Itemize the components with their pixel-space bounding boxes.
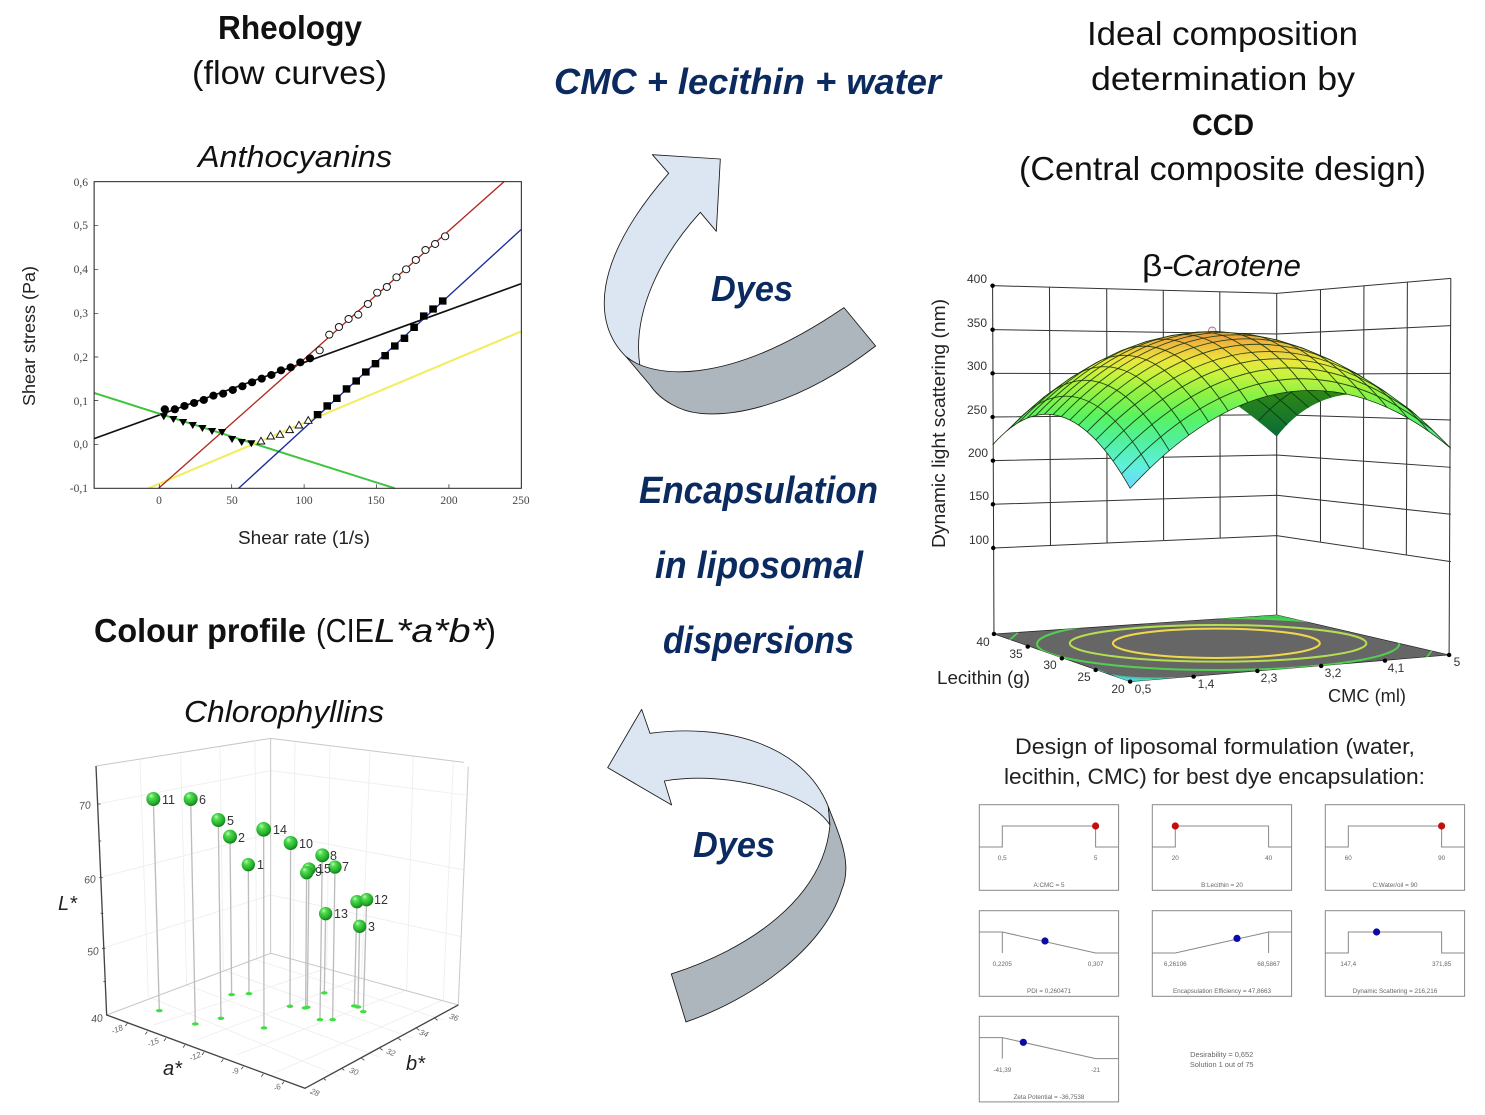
heading: colour profile: ) bbox=[485, 612, 496, 649]
panel: zeta potential: -21 bbox=[1091, 1067, 1101, 1074]
chart: 3D response surface: 3,2 bbox=[1325, 666, 1342, 680]
heading: encapsulation in liposomal dispersions bbox=[639, 470, 878, 662]
panel: C water oil: C:Water/oil = 90 bbox=[1372, 882, 1418, 889]
heading: ideal composition CCD: determination by bbox=[1091, 60, 1356, 97]
chart: 3D response surface: 20 bbox=[1111, 682, 1125, 696]
chart: 3D scatter of colour coordinates: 9 bbox=[315, 865, 322, 879]
chart: 3D scatter of colour coordinates: 5 bbox=[227, 814, 234, 828]
chart: 3D response surface: 4,1 bbox=[1388, 661, 1405, 675]
heading: colour profile bbox=[94, 612, 496, 649]
floor contour plot bbox=[994, 615, 1449, 682]
panel: encapsulation efficiency bbox=[1152, 911, 1292, 996]
text: desirability summary bbox=[1190, 1050, 1254, 1069]
heading: colour profile: Colour profile bbox=[94, 612, 306, 649]
chart: 3D scatter of colour coordinates: -12 bbox=[188, 1050, 203, 1063]
panel: A CMC: 0,5 bbox=[998, 855, 1007, 862]
panel: encapsulation efficiency: Encapsulation Efficiency = 47,8663 bbox=[1173, 988, 1272, 995]
panel: C water oil: 90 bbox=[1438, 855, 1446, 862]
chart: flow curves: 0,6 bbox=[74, 177, 88, 189]
heading: rheology: Rheology bbox=[218, 9, 363, 46]
chart: 3D scatter of colour coordinates: 3 bbox=[368, 920, 375, 934]
panel: C water oil: 60 bbox=[1345, 855, 1352, 862]
chart: flow curves bbox=[19, 177, 530, 548]
chart: flow curves: 200 bbox=[440, 495, 458, 507]
heading: colour profile: L*a*b* bbox=[374, 612, 487, 649]
chart: 3D scatter of colour coordinates: 10 bbox=[299, 837, 313, 851]
chart: 3D scatter of colour coordinates: 34 bbox=[418, 1028, 430, 1040]
text: desirability summary: Solution 1 out of 75 bbox=[1190, 1060, 1254, 1069]
chart: flow curves: 0,4 bbox=[74, 264, 88, 276]
chart: 3D response surface: 200 bbox=[968, 446, 988, 460]
chart: 3D scatter of colour coordinates: 13 bbox=[334, 907, 348, 921]
panel: B lecithin: 40 bbox=[1265, 855, 1273, 862]
panel: zeta potential bbox=[979, 1016, 1119, 1102]
chart: 3D scatter of colour coordinates: a* bbox=[163, 1058, 183, 1080]
chart: 3D scatter of colour coordinates: 12 bbox=[374, 893, 388, 907]
chart: 3D response surface bbox=[928, 272, 1461, 706]
chart: 3D response surface: 2,3 bbox=[1261, 671, 1278, 685]
heading: encapsulation in liposomal dispersions: in liposomal bbox=[655, 545, 864, 587]
chart: 3D scatter of colour coordinates: 7 bbox=[342, 860, 349, 874]
chart: 3D response surface: 300 bbox=[967, 359, 987, 373]
arrow: upper dyes arrow bbox=[604, 155, 876, 414]
panel: B lecithin bbox=[1152, 805, 1292, 890]
chart: flow curves: 0,2 bbox=[74, 352, 88, 364]
heading: colour profile: (CIE bbox=[316, 612, 374, 649]
chart: 3D scatter of colour coordinates: 32 bbox=[385, 1047, 397, 1059]
chart: 3D scatter of colour coordinates: -9 bbox=[230, 1066, 241, 1077]
subheading: beta-carotene: β- bbox=[1142, 248, 1174, 283]
chart: 3D scatter of colour coordinates: 11 bbox=[162, 793, 175, 807]
label: dyes lower: Dyes bbox=[693, 824, 775, 865]
chart: 3D response surface: 1,4 bbox=[1198, 677, 1215, 691]
heading: ideal composition CCD: (Central composite design) bbox=[1019, 150, 1426, 187]
chart: 3D response surface: 5 bbox=[1454, 655, 1461, 669]
panel: PDI: 0,2205 bbox=[993, 961, 1012, 968]
chart: flow curves: -0,1 bbox=[70, 483, 88, 495]
chart: 3D scatter of colour coordinates: 36 bbox=[448, 1012, 460, 1024]
panel: dynamic scattering: 371,85 bbox=[1432, 961, 1452, 968]
chart: 3D scatter of colour coordinates: 14 bbox=[273, 823, 287, 837]
chart: flow curves: 0,1 bbox=[74, 396, 88, 408]
panel: A CMC: A:CMC = 5 bbox=[1034, 882, 1065, 889]
subheading: anthocyanins: Anthocyanins bbox=[196, 139, 392, 174]
panel: zeta potential: Zeta Potential = -36,7538 bbox=[1014, 1094, 1085, 1101]
subheading: chlorophyllins: Chlorophyllins bbox=[184, 694, 384, 729]
panel: dynamic scattering bbox=[1325, 911, 1465, 996]
panel: PDI: PDI = 0,260471 bbox=[1027, 988, 1071, 995]
chart: 3D scatter of colour coordinates: 70 bbox=[78, 799, 92, 813]
chart: 3D response surface: 30 bbox=[1043, 658, 1057, 672]
chart: flow curves: 0,0 bbox=[74, 439, 88, 451]
chart: 3D response surface: 400 bbox=[967, 272, 987, 286]
chart: 3D scatter of colour coordinates: 40 bbox=[90, 1012, 104, 1026]
chart: 3D scatter of colour coordinates: 15 bbox=[317, 862, 331, 876]
chart: 3D scatter of colour coordinates: 50 bbox=[86, 945, 100, 959]
panel: B lecithin: B:Lecithin = 20 bbox=[1201, 882, 1243, 889]
chart: 3D scatter of colour coordinates: 28 bbox=[308, 1086, 321, 1099]
chart: flow curves: 0,5 bbox=[74, 220, 88, 232]
label: dyes upper: Dyes bbox=[711, 268, 793, 309]
chart: flow curves: 0 bbox=[156, 495, 162, 507]
chart: flow curves: Shear rate (1/s) bbox=[238, 528, 370, 548]
text: design of liposomal formulation: Design of liposomal formulation (water, bbox=[1015, 734, 1415, 759]
chart: 3D scatter of colour coordinates: 6 bbox=[199, 793, 206, 807]
panel: B lecithin: 20 bbox=[1172, 855, 1179, 862]
chart: flow curves: Shear stress (Pa) bbox=[19, 266, 39, 406]
heading: rheology bbox=[192, 9, 387, 91]
panel: PDI: 0,307 bbox=[1088, 961, 1104, 968]
chart: flow curves: 150 bbox=[367, 495, 385, 507]
chart: 3D response surface: 40 bbox=[976, 635, 990, 649]
chart: flow curves: 100 bbox=[295, 495, 313, 507]
arrow: lower dyes arrow bbox=[608, 709, 846, 1022]
chart: 3D scatter of colour coordinates bbox=[58, 738, 468, 1099]
chart: 3D response surface: 100 bbox=[969, 533, 989, 547]
panel: A CMC: 5 bbox=[1094, 855, 1098, 862]
chart: 3D response surface: CMC (ml) bbox=[1328, 685, 1406, 706]
heading: ideal composition CCD: Ideal composition bbox=[1087, 15, 1358, 52]
chart: 3D response surface: 150 bbox=[969, 489, 989, 503]
heading: encapsulation in liposomal dispersions: dispersions bbox=[663, 620, 854, 662]
dome surface with mesh bbox=[993, 331, 1451, 488]
panel: zeta potential: -41,39 bbox=[993, 1067, 1012, 1074]
heading: ideal composition CCD: CCD bbox=[1192, 109, 1254, 142]
chart: 3D response surface: 25 bbox=[1077, 670, 1091, 684]
chart: 3D scatter of colour coordinates: L* bbox=[58, 893, 78, 915]
chart: 3D scatter of colour coordinates: 30 bbox=[348, 1066, 360, 1078]
chart: 3D response surface: Lecithin (g) bbox=[937, 667, 1030, 688]
panel: A CMC bbox=[979, 805, 1119, 890]
panel: encapsulation efficiency: 68,5867 bbox=[1257, 961, 1280, 968]
chart: 3D scatter of colour coordinates: -6 bbox=[272, 1082, 283, 1093]
chart: 3D response surface: Dynamic light scattering (nm) bbox=[928, 299, 949, 548]
text: design of liposomal formulation: lecithin, CMC) for best dye encapsulation: bbox=[1004, 764, 1425, 789]
heading: rheology: (flow curves) bbox=[192, 54, 387, 91]
panel: C water oil bbox=[1325, 805, 1465, 890]
panel: PDI bbox=[979, 911, 1119, 996]
chart: 3D scatter of colour coordinates: 60 bbox=[83, 873, 97, 887]
panel: encapsulation efficiency: 6,26106 bbox=[1164, 961, 1187, 968]
chart: 3D response surface: 0,5 bbox=[1135, 682, 1152, 696]
chart: 3D scatter of colour coordinates: 8 bbox=[330, 849, 337, 863]
chart: 3D scatter of colour coordinates: 2 bbox=[238, 831, 245, 845]
heading: encapsulation in liposomal dispersions: Encapsulation bbox=[639, 470, 878, 512]
chart: flow curves: 250 bbox=[512, 495, 530, 507]
panel: desirability charts bbox=[979, 805, 1465, 1102]
chart: 3D scatter of colour coordinates: -18 bbox=[110, 1023, 125, 1036]
chart: flow curves: 0,3 bbox=[74, 308, 88, 320]
panel: dynamic scattering: Dynamic Scattering = 216,216 bbox=[1353, 988, 1438, 995]
subheading: beta-carotene: Carotene bbox=[1172, 248, 1301, 283]
chart: 3D response surface: 250 bbox=[967, 403, 987, 417]
chart: 3D response surface: 350 bbox=[967, 316, 987, 330]
text: desirability summary: Desirability = 0,652 bbox=[1190, 1050, 1253, 1059]
chart: 3D scatter of colour coordinates: b* bbox=[406, 1053, 426, 1075]
panel: dynamic scattering: 147,4 bbox=[1340, 961, 1357, 968]
text: design of liposomal formulation bbox=[1004, 734, 1425, 789]
heading: ideal composition CCD bbox=[1019, 15, 1426, 187]
chart: 3D scatter of colour coordinates: 1 bbox=[257, 858, 264, 872]
chart: 3D response surface: 35 bbox=[1009, 647, 1023, 661]
underside of surface bbox=[1238, 390, 1347, 436]
chart: 3D scatter of colour coordinates: -15 bbox=[146, 1036, 161, 1049]
heading: CMC lecithin water: CMC + lecithin + water bbox=[554, 61, 943, 102]
chart: flow curves: 50 bbox=[226, 495, 238, 507]
